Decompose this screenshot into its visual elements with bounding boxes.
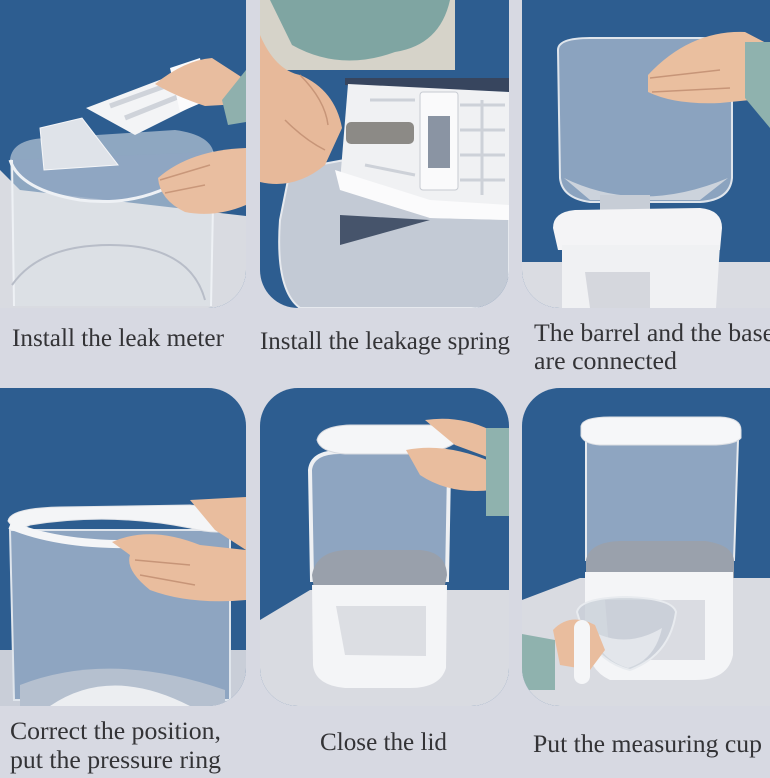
hand and handle bbox=[553, 620, 605, 670]
hands bbox=[648, 32, 770, 103]
lid bbox=[317, 425, 461, 454]
measuring cup bbox=[577, 597, 676, 670]
barrel bbox=[10, 530, 230, 700]
caption: correct the position: put the pressure ring bbox=[10, 747, 222, 774]
base bbox=[585, 572, 733, 680]
white meter tray bbox=[340, 84, 509, 220]
caption: barrel and base bbox=[534, 320, 770, 375]
caption: install the leakage spring: Install the leakage spring bbox=[260, 328, 510, 355]
leak meter bbox=[86, 79, 191, 135]
hands bbox=[112, 534, 246, 601]
caption: put the measuring cup: Put the measuring cup bbox=[533, 731, 762, 758]
caption: barrel and base: are connected bbox=[534, 348, 678, 375]
panel: put the measuring cup bbox=[522, 388, 770, 706]
barrel bbox=[586, 440, 738, 560]
caption: barrel and base: The barrel and the base bbox=[534, 320, 770, 347]
lid bbox=[581, 417, 741, 445]
hands bbox=[155, 58, 246, 106]
spring bbox=[346, 122, 414, 144]
panel: install the leakage spring bbox=[260, 0, 509, 308]
panel: close the lid bbox=[260, 388, 509, 706]
base bbox=[553, 208, 722, 250]
barrel bbox=[310, 452, 449, 580]
panel: install the leak meter bbox=[0, 0, 246, 308]
caption: correct the position bbox=[10, 718, 222, 774]
pressure ring bbox=[8, 505, 236, 532]
transparent barrel bbox=[10, 130, 214, 208]
hands bbox=[425, 419, 490, 458]
caption: correct the position: Correct the position, bbox=[10, 718, 221, 745]
panel: correct the position bbox=[0, 388, 246, 706]
caption: close the lid: Close the lid bbox=[320, 729, 447, 756]
base bbox=[312, 585, 447, 688]
caption: install the leak meter: Install the leak meter bbox=[12, 325, 225, 352]
hand bbox=[260, 35, 342, 184]
panel: barrel and base connected bbox=[522, 0, 770, 308]
barrel bbox=[558, 38, 732, 202]
